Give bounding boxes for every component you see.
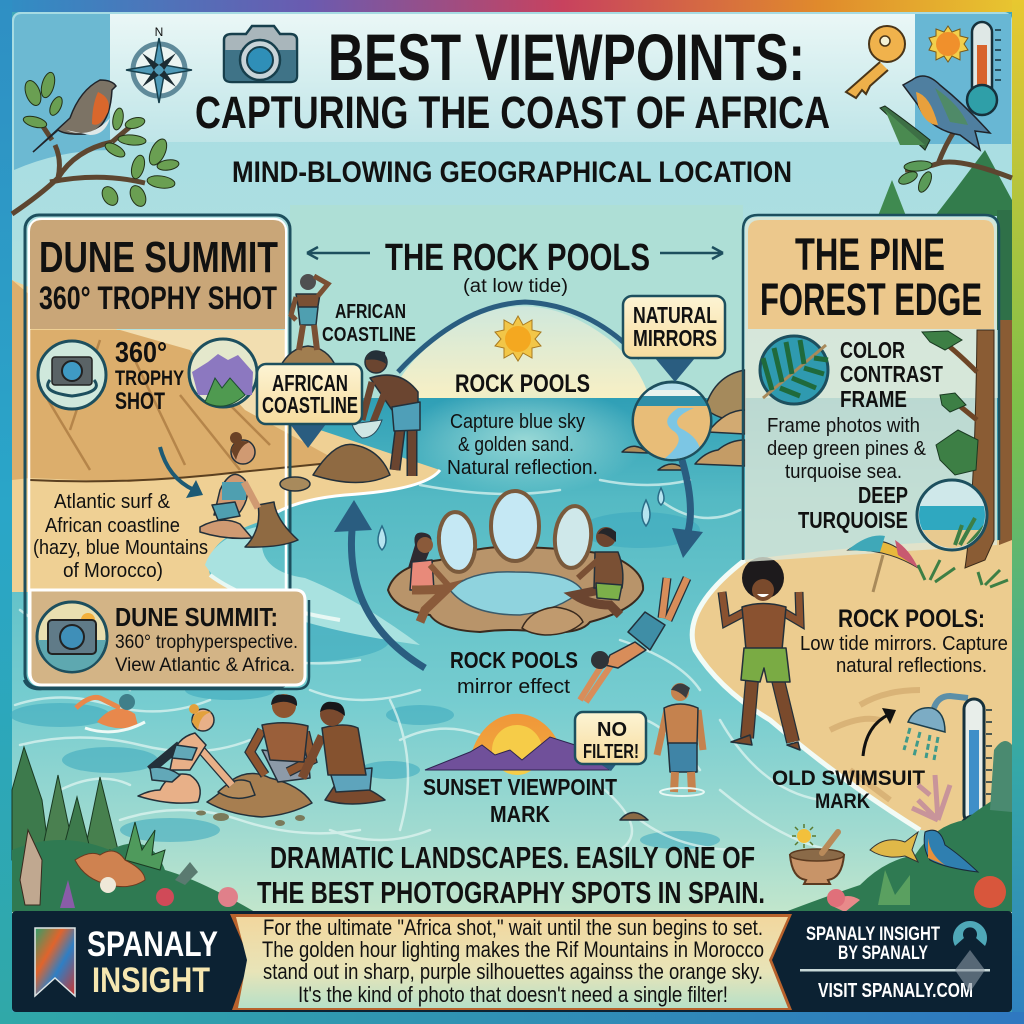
footer tip banner: It's the kind of photo that doesn't need a single filter! [298, 982, 728, 1007]
sunset viewpoint label [423, 774, 617, 827]
figure: man in water [657, 683, 704, 796]
deep turquoise label: TURQUOISE [798, 507, 908, 533]
pine trunk [965, 330, 994, 568]
old swimsuit mark label [772, 767, 925, 813]
closing statement: DRAMATIC LANDSCAPES. EASILY ONE OF [270, 840, 755, 875]
figure: woman building sandcastle [200, 432, 310, 547]
footer credit [800, 921, 990, 1002]
footer brand: INSIGHT [92, 961, 210, 1000]
icon: key [846, 26, 905, 98]
atlantic surf text: African coastline [45, 515, 180, 537]
footer brand: SPANALY [87, 925, 218, 964]
dune summit info box: View Atlantic & Africa. [115, 655, 295, 676]
icon: pine needle [760, 336, 828, 404]
icon: sun [929, 26, 968, 62]
atlantic surf text: Atlantic surf & [54, 491, 171, 513]
icon: rotating camera [38, 341, 106, 409]
right beach [692, 540, 1012, 832]
title band [195, 20, 830, 189]
rocks on the right shore [622, 370, 745, 470]
rock pools text: Natural reflection. [447, 457, 598, 479]
african coastline label: COASTLINE [322, 324, 416, 346]
callout: african coastline: AFRICAN [272, 370, 348, 396]
trophy shot label: 360° [115, 337, 167, 369]
icon: logo [953, 921, 987, 992]
closing statement: THE BEST PHOTOGRAPHY SPOTS IN SPAIN. [257, 875, 765, 910]
dune summit header: 360° TROPHY SHOT [39, 280, 277, 316]
rock pools right text [800, 605, 1008, 677]
rock pools right text: natural reflections. [836, 655, 987, 677]
trees upper right [878, 150, 1012, 545]
figure: smiling man on right beach [722, 557, 800, 750]
deep turquoise label: DEEP [858, 482, 908, 508]
small rock [620, 812, 648, 820]
icon: sun center [495, 316, 541, 361]
icon: camera [224, 26, 297, 82]
callout: no filter: FILTER! [583, 741, 639, 763]
frame photos text: deep green pines & [767, 438, 927, 460]
atlantic surf text: (hazy, blue Mountains [33, 537, 208, 559]
central pool with mirrors [388, 491, 643, 635]
rock pools text: Capture blue sky [450, 411, 585, 433]
footer tip banner: stand out in sharp, purple silhouettes againss the orange sky. [263, 959, 763, 984]
figure: swimmer [76, 694, 145, 732]
callout: african coastline [257, 364, 362, 448]
foliage bottom right [785, 741, 1012, 912]
figure: diver [580, 578, 687, 702]
color contrast label [840, 337, 943, 412]
trophy shot label: TROPHY [115, 367, 184, 390]
illustration: right bird and branch [880, 76, 1012, 194]
icon: mountains [189, 339, 257, 407]
figure: man bending at mound [313, 351, 420, 482]
sunset viewpoint label: MARK [490, 801, 550, 827]
callout: no filter [575, 712, 646, 771]
figure group: sand builders [138, 694, 385, 826]
panel: pine forest edge [743, 215, 999, 568]
arrow: curved up left [334, 500, 425, 668]
icon: turquoise sea [917, 480, 988, 550]
cliffs and beach [12, 280, 440, 592]
ripple network [15, 480, 830, 850]
color contrast label: CONTRAST [840, 361, 943, 387]
icon: mirror scene [632, 382, 712, 462]
footer credit: SPANALY INSIGHT [806, 924, 940, 945]
rock pools text: & golden sand. [458, 434, 574, 456]
dune summit info box [24, 590, 309, 689]
trophy shot label [115, 337, 184, 415]
footer bar [12, 911, 1012, 1012]
old swimsuit mark label: MARK [815, 790, 870, 813]
dune summit header: DUNE SUMMIT [39, 233, 278, 282]
sunset viewpoint label: SUNSET VIEWPOINT [423, 774, 617, 800]
rock pools right text: ROCK POOLS: [838, 605, 985, 633]
dune summit header [30, 220, 285, 329]
callout: natural mirrors: MIRRORS [633, 325, 717, 351]
closing statement [257, 840, 765, 910]
figure: person left of pool [408, 532, 448, 622]
rock pools mirror effect text: ROCK POOLS [450, 647, 578, 673]
callout: natural mirrors [623, 296, 725, 462]
trophy shot label: SHOT [115, 388, 165, 415]
dark water cells [10, 512, 720, 849]
illustration: left bird and branch [12, 71, 180, 214]
rock pools text [447, 370, 598, 479]
icon: mortar and bowl [790, 824, 844, 884]
subtitle: MIND-BLOWING GEOGRAPHICAL LOCATION [232, 156, 792, 189]
pine forest header: THE PINE [795, 229, 945, 280]
icon: shower [904, 696, 968, 760]
figure: man on rock [280, 274, 336, 367]
arc arrow [398, 302, 640, 372]
arrow to shower [863, 708, 896, 756]
color contrast label: COLOR [840, 337, 905, 363]
footer tip banner: For the ultimate "Africa shot," wait until the sun begins to set. [263, 915, 763, 940]
african coastline label: AFRICAN [335, 301, 406, 323]
icon: sunset [425, 714, 610, 775]
frame photos text: Frame photos with [767, 415, 920, 437]
pine branches [935, 335, 977, 420]
icon: camera with sun [37, 602, 107, 672]
frame photos text: turquoise sea. [785, 461, 902, 483]
stepping stones [196, 810, 305, 826]
panel: dune summit [24, 215, 309, 689]
icon: thermometer top [967, 22, 1001, 115]
pine foliage [922, 331, 978, 475]
african coastline label [322, 301, 416, 346]
icon: thermometer bottom [960, 699, 992, 844]
color contrast label: FRAME [840, 386, 907, 412]
pine forest header [748, 220, 994, 329]
title line 1: BEST VIEWPOINTS: [328, 20, 805, 94]
rock pools mirror effect text: mirror effect [457, 676, 570, 698]
woman [138, 704, 232, 803]
old swimsuit mark label: OLD SWIMSUIT [772, 767, 925, 790]
beach grass [918, 560, 1008, 587]
heading: the rock pools: THE ROCK POOLS [385, 237, 650, 279]
figure: person right of pool [575, 527, 623, 615]
water drops [378, 488, 664, 550]
icon: beach umbrella [848, 536, 918, 592]
man one [250, 694, 312, 782]
man two [302, 702, 385, 804]
foliage bottom left [12, 747, 255, 912]
atlantic surf text: of Morocco) [63, 560, 163, 582]
title line 2: CAPTURING THE COAST OF AFRICA [195, 87, 830, 138]
atlantic surf text [33, 491, 208, 582]
icon: compass [126, 25, 192, 103]
callout: natural mirrors: NATURAL [633, 302, 717, 328]
heading: the rock pools [307, 237, 723, 297]
dune summit info box: DUNE SUMMIT: [115, 602, 278, 632]
arrow: down right [672, 460, 703, 558]
icon: ribbon [35, 928, 75, 996]
icon: compass: N [155, 25, 163, 39]
frame photos text [767, 415, 927, 483]
footer tip banner [230, 914, 792, 1010]
dune summit info box: 360° trophyperspective. [115, 632, 298, 653]
footer credit: VISIT SPANALY.COM [818, 980, 973, 1002]
deep turquoise label [798, 482, 908, 533]
footer credit: BY SPANALY [838, 943, 928, 964]
heading: the rock pools: (at low tide) [463, 276, 568, 297]
rock pools text: ROCK POOLS [455, 370, 590, 398]
rock pools right text: Low tide mirrors. Capture [800, 633, 1008, 655]
footer brand [35, 925, 218, 1000]
arrow to woman [160, 447, 203, 498]
callout: african coastline: COASTLINE [262, 392, 358, 418]
footer tip banner: The golden hour lighting makes the Rif Mountains in Morocco [262, 937, 764, 962]
coral [912, 775, 950, 820]
callout: no filter: NO [597, 719, 627, 741]
rock pools mirror effect text [450, 647, 578, 698]
